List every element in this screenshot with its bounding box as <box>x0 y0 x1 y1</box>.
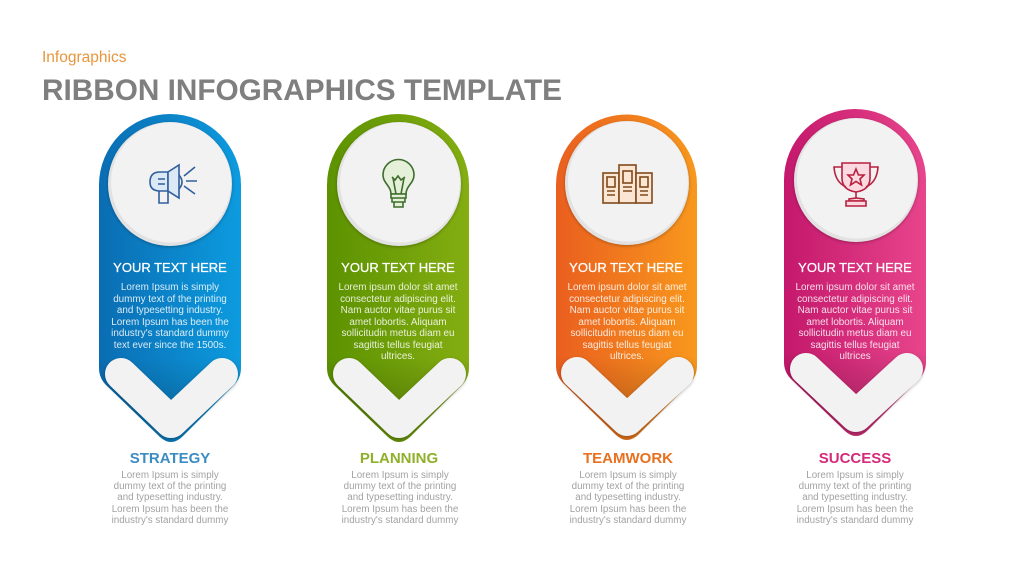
body text: sollicitudin metus diam eu <box>798 328 912 339</box>
label: TEAMWORK <box>583 450 673 467</box>
body text: and typesetting industry. <box>117 305 223 316</box>
body text: sagittis tellus feugiat <box>354 340 443 351</box>
footer text: and typesetting industry. <box>575 492 681 503</box>
ribbon shape <box>99 114 241 442</box>
ribbon shape <box>327 114 469 442</box>
footer text: industry's standard dummy <box>797 515 913 526</box>
footer text: Lorem Ipsum is simply <box>121 470 219 481</box>
body text: amet lobortis. Aliquam <box>578 317 676 328</box>
icon: light bulb <box>383 160 414 207</box>
body text: text ever since the 1500s. <box>114 340 226 351</box>
chevron <box>577 373 678 420</box>
footer text: dummy text of the printing <box>799 481 911 492</box>
body text: ultrices. <box>610 351 644 362</box>
footer text: Lorem Ipsum is simply <box>806 470 904 481</box>
footer text: Lorem Ipsum has been the <box>797 504 914 515</box>
heading: YOUR TEXT HERE <box>113 260 227 275</box>
body text: dummy text of the printing <box>113 294 227 305</box>
body text: industry's standard dummy <box>111 328 229 339</box>
label: SUCCESS <box>819 450 891 467</box>
footer text: and typesetting industry. <box>802 492 908 503</box>
body text: Lorem Ipsum has been the <box>111 317 229 328</box>
circle <box>108 122 232 246</box>
footer text: Lorem Ipsum is simply <box>351 470 449 481</box>
ribbon shape <box>556 115 697 440</box>
label: STRATEGY <box>130 450 210 467</box>
label: PLANNING <box>360 450 438 467</box>
footer text <box>570 470 687 526</box>
footer text: and typesetting industry. <box>117 492 223 503</box>
circle <box>565 121 689 245</box>
footer text <box>342 470 459 526</box>
panel: strategy <box>99 114 241 526</box>
body text: sollicitudin metus diam eu <box>341 328 455 339</box>
footer text: industry's standard dummy <box>112 515 228 526</box>
footer text: Lorem Ipsum has been the <box>342 504 459 515</box>
footer text: industry's standard dummy <box>570 515 686 526</box>
body text: amet lobortis. Aliquam <box>349 317 447 328</box>
footer text: industry's standard dummy <box>342 515 458 526</box>
footer text: Lorem Ipsum has been the <box>570 504 687 515</box>
heading: YOUR TEXT HERE <box>798 260 912 275</box>
body text: consectetur adipiscing elit. <box>797 294 913 305</box>
body text: consectetur adipiscing elit. <box>340 294 456 305</box>
footer text: Lorem Ipsum is simply <box>579 470 677 481</box>
footer text: Lorem Ipsum has been the <box>112 504 229 515</box>
body text: consectetur adipiscing elit. <box>569 294 685 305</box>
body text: Nam auctor vitae purus sit <box>798 305 913 316</box>
body text: ultrices <box>839 351 871 362</box>
panel: teamwork <box>556 115 697 526</box>
chevron <box>349 374 450 422</box>
panel: success <box>784 109 926 526</box>
body text: ultrices. <box>381 351 415 362</box>
body text: Lorem Ipsum is simply <box>121 282 219 293</box>
heading: YOUR TEXT HERE <box>341 260 455 275</box>
footer text: dummy text of the printing <box>114 481 226 492</box>
circle <box>337 122 461 246</box>
chevron <box>121 374 222 422</box>
title: RIBBON INFOGRAPHICS TEMPLATE <box>42 74 562 107</box>
body text: Lorem ipsum dolor sit amet <box>567 282 687 293</box>
ribbon shape <box>784 109 926 436</box>
body text: Lorem ipsum dolor sit amet <box>338 282 458 293</box>
footer text: and typesetting industry. <box>347 492 453 503</box>
body text: Nam auctor vitae purus sit <box>341 305 456 316</box>
panel: planning <box>327 114 469 526</box>
icon: trophy <box>834 163 878 206</box>
circle <box>794 118 918 242</box>
body text: amet lobortis. Aliquam <box>806 317 904 328</box>
icon: megaphone <box>150 165 197 203</box>
footer text <box>112 470 229 526</box>
body text <box>338 282 458 362</box>
body text: Nam auctor vitae purus sit <box>570 305 685 316</box>
body text <box>795 282 915 362</box>
body text: Lorem ipsum dolor sit amet <box>795 282 915 293</box>
heading: YOUR TEXT HERE <box>569 260 683 275</box>
chevron <box>806 369 907 416</box>
body text <box>111 282 229 351</box>
body text: sagittis tellus feugiat <box>811 340 900 351</box>
body text: sollicitudin metus diam eu <box>570 328 684 339</box>
footer text: dummy text of the printing <box>344 481 456 492</box>
subtitle: Infographics <box>42 49 127 66</box>
body text: sagittis tellus feugiat <box>583 340 672 351</box>
body text <box>567 282 687 362</box>
footer text: dummy text of the printing <box>572 481 684 492</box>
footer text <box>797 470 914 526</box>
icon: books <box>603 165 652 203</box>
